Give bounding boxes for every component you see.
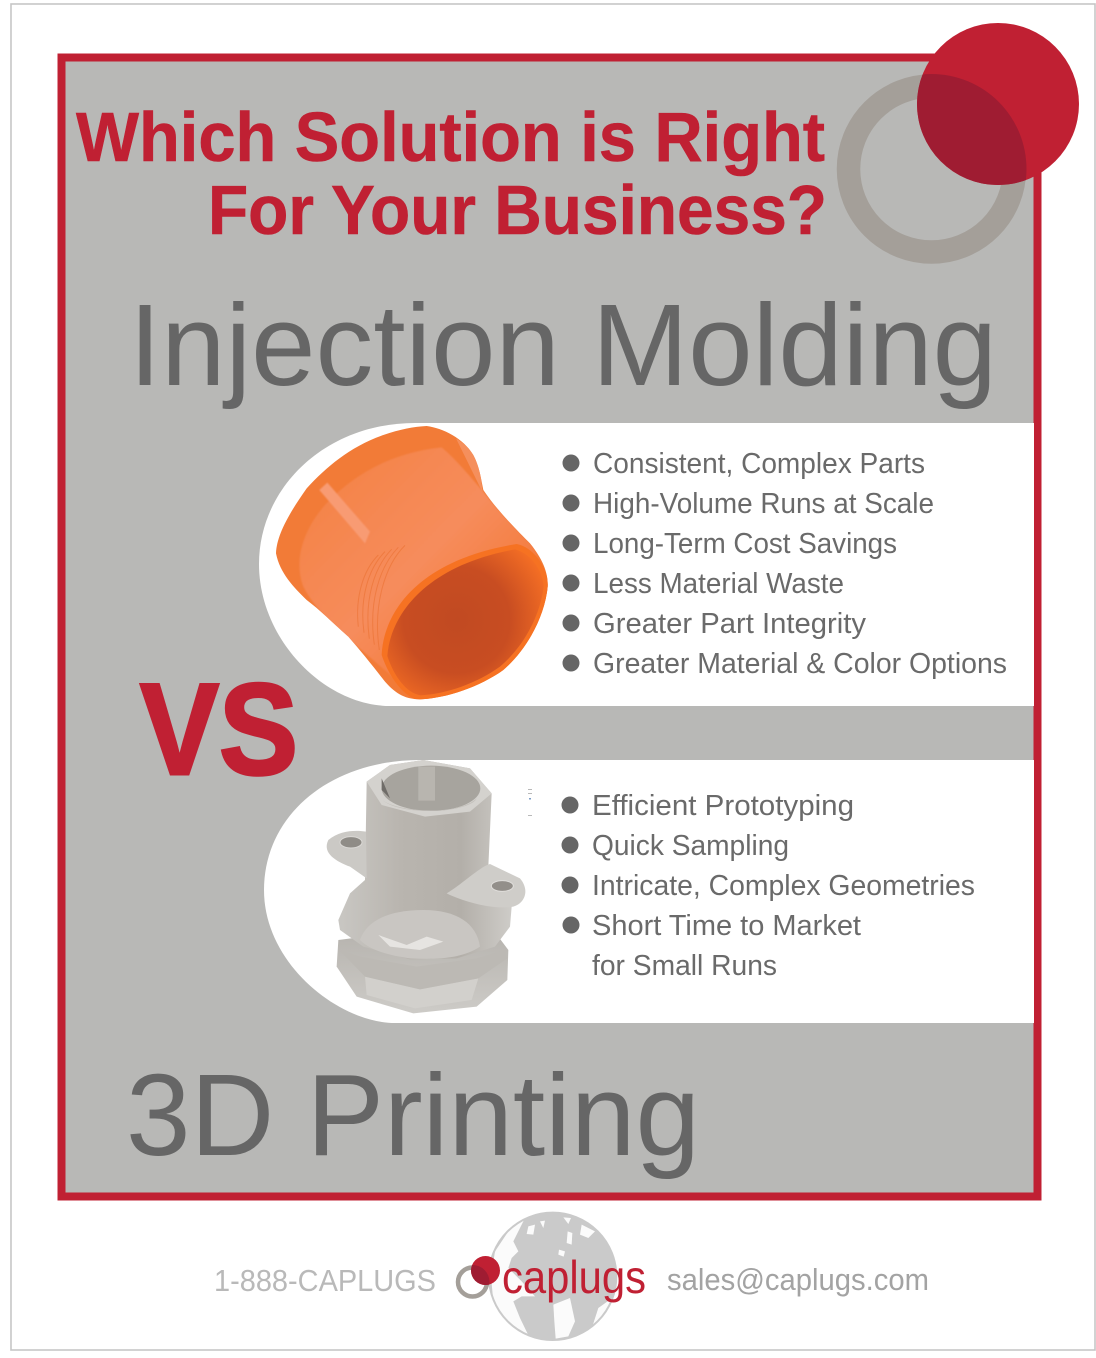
bullet: high-volume runs: High-Volume Runs at Scale bbox=[593, 488, 934, 520]
title: Which Solution is Right bbox=[76, 98, 825, 176]
logo wordmark: caplugs bbox=[502, 1251, 646, 1303]
panel: main grey background with red border bbox=[62, 58, 1038, 1196]
bullet: short time to market for small runs bbox=[562, 910, 861, 982]
icon: globe bbox=[488, 1212, 617, 1341]
bullet: consistent, complex parts: Consistent, Complex Parts bbox=[593, 448, 925, 480]
list: 3D printing benefits bbox=[562, 790, 975, 982]
logo: caplugs bbox=[456, 1256, 644, 1302]
small specks beside fitting bbox=[528, 789, 532, 816]
logo ring and dot bbox=[458, 1256, 500, 1296]
footer phone number: 1-888-CAPLUGS bbox=[214, 1263, 436, 1298]
icon: grey ring and red circle emblem bbox=[848, 23, 1079, 252]
heading: 3D Printing: 3D Printing bbox=[126, 1050, 700, 1180]
footer email address: sales@caplugs.com bbox=[667, 1262, 929, 1297]
panel: injection molding benefits bbox=[259, 423, 1034, 706]
bullet: less material waste: Less Material Waste bbox=[593, 568, 844, 600]
icon: orange molded cap bbox=[270, 420, 553, 703]
title bbox=[76, 98, 827, 249]
bullet: quick sampling: Quick Sampling bbox=[592, 830, 789, 862]
bullet: intricate geometries: Intricate, Complex Geometries bbox=[592, 870, 975, 902]
bullet: efficient prototyping: Efficient Prototyping bbox=[592, 790, 854, 822]
bullet: greater material and color options: Greater Material & Color Options bbox=[593, 648, 1007, 680]
bullet: greater part integrity: Greater Part Integrity bbox=[593, 608, 866, 640]
list: injection molding benefits bbox=[562, 448, 1007, 680]
icon: grey 3D printed fitting bbox=[327, 760, 525, 1013]
bullet: short time to market for small runs: Short Time to Market bbox=[592, 910, 861, 942]
title: For Your Business? bbox=[208, 171, 827, 249]
bullet: long-term cost savings: Long-Term Cost Savings bbox=[593, 528, 897, 560]
versus label: VS bbox=[140, 656, 298, 802]
heading: Injection Molding: Injection Molding bbox=[129, 280, 997, 410]
panel: 3D printing benefits bbox=[264, 760, 1034, 1023]
bullet: short time to market for small runs: for Small Runs bbox=[592, 950, 777, 982]
